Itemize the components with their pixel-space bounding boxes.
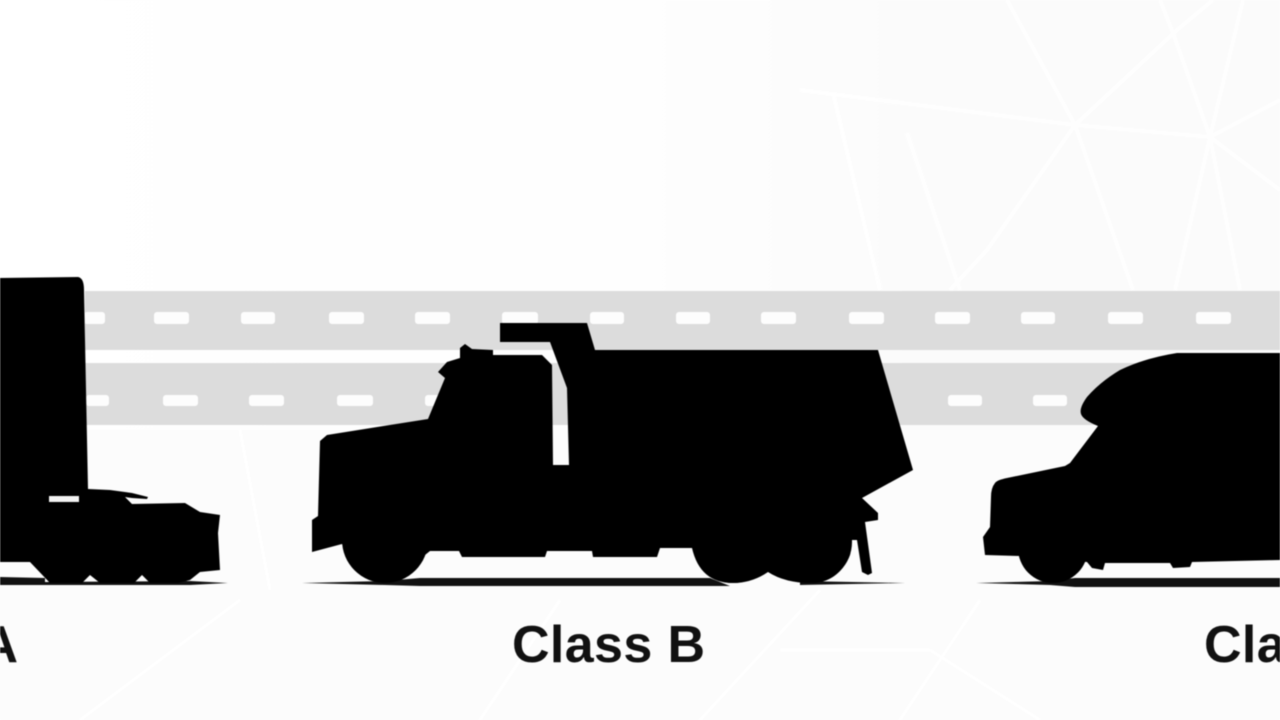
ground shadow: Class C	[976, 578, 1280, 587]
truck silhouette: Class A tractor	[0, 277, 220, 583]
truck silhouette: Class C box truck	[983, 353, 1280, 583]
ground shadow: Class B	[302, 578, 905, 586]
truck silhouette: Class B dump truck	[312, 323, 913, 583]
road: lower lane	[85, 363, 1280, 425]
road: upper lane	[84, 291, 1280, 350]
ground shadow: Class A	[0, 577, 228, 585]
label: Class B: Class B	[512, 616, 705, 674]
